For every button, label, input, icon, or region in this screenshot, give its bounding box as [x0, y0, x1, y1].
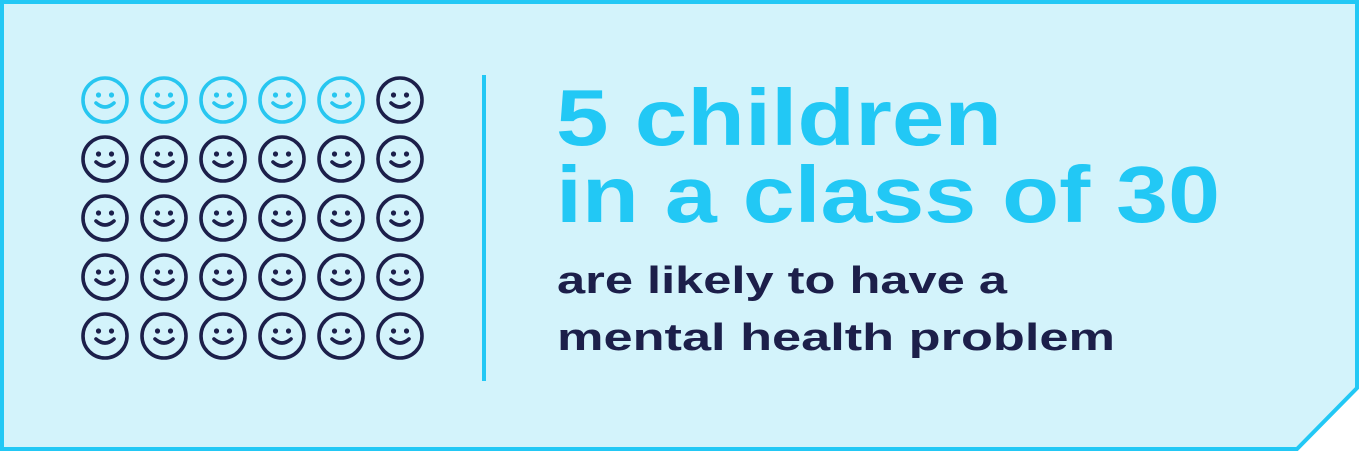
- supporting text: mental health problem: [557, 317, 1115, 359]
- headline statistic: [556, 73, 1220, 239]
- supporting text: are likely to have a: [557, 260, 1008, 302]
- headline statistic: 5 children: [556, 73, 1002, 162]
- divider line: [482, 75, 486, 381]
- supporting text: [557, 260, 1115, 359]
- headline statistic: in a class of 30: [556, 150, 1220, 239]
- icon grid: 30 smiley faces, 5 highlighted: [83, 78, 422, 358]
